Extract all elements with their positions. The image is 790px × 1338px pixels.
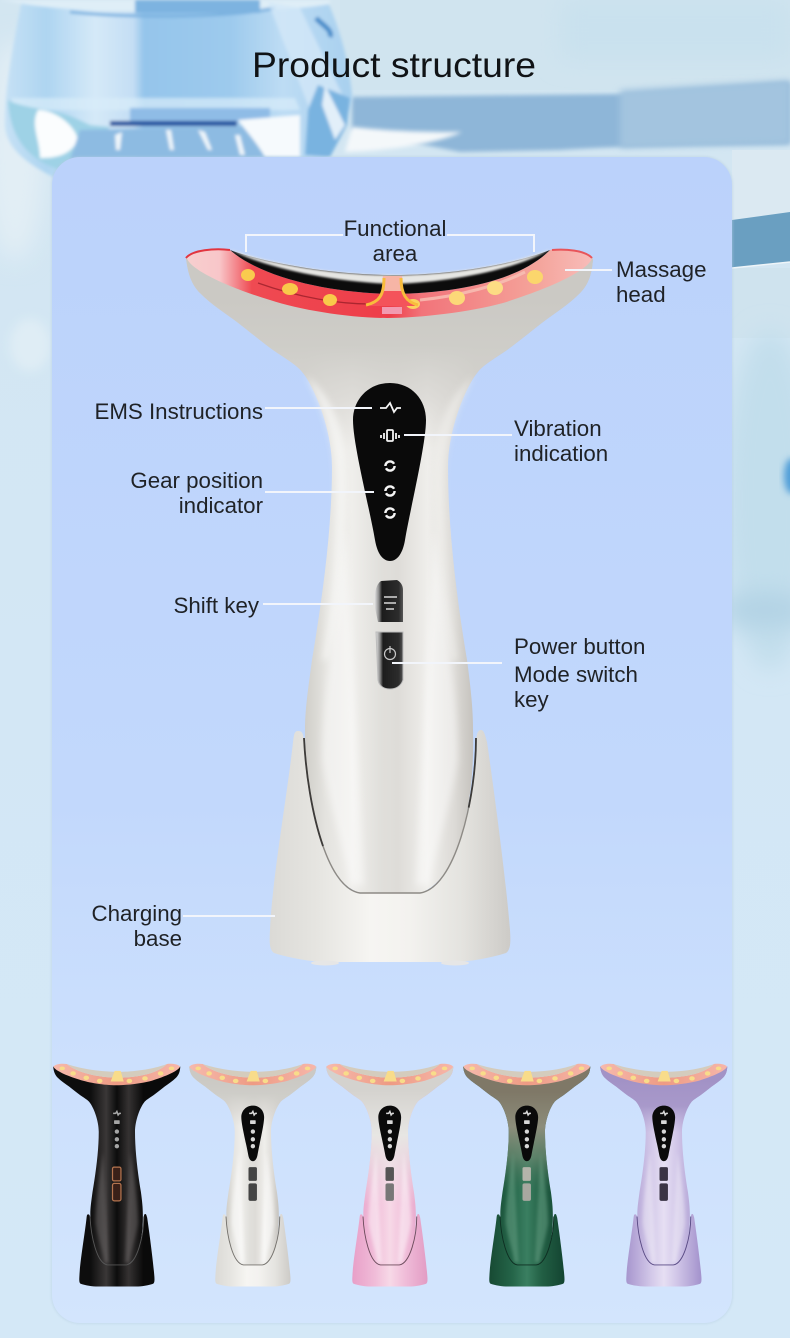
label: charging base: base [134, 926, 182, 951]
main panel [51, 156, 733, 1324]
label: gear position indicator [130, 468, 374, 518]
label: functional area: Functional [344, 216, 446, 241]
colour variant: black [53, 1064, 180, 1287]
colour variant: white [189, 1064, 316, 1287]
icon: vibration [381, 430, 399, 441]
gear indicators [385, 461, 395, 518]
label: charging base [92, 901, 275, 951]
power / mode key [376, 632, 403, 689]
label: massage head [565, 257, 706, 307]
label: vibration indication [404, 416, 608, 466]
label: vibration indication: indication [514, 441, 608, 466]
control panel [353, 383, 426, 561]
label: functional area [246, 216, 534, 266]
label: vibration indication: Vibration [514, 416, 602, 441]
colour variant: purple [600, 1064, 727, 1287]
shift key [375, 580, 403, 622]
icon: EMS pulse [380, 403, 401, 412]
head light band [186, 249, 592, 318]
label: massage head: head [616, 282, 666, 307]
label: massage head: Massage [616, 257, 706, 282]
colour variant: pink [326, 1064, 453, 1287]
glass of water [0, 0, 352, 178]
label: EMS instructions: EMS Instructions [94, 399, 263, 424]
colour variant: green [463, 1064, 590, 1287]
label: power button, mode switch key [392, 634, 645, 712]
label: power button, mode switch key: Power button [514, 634, 645, 659]
label: shift key: Shift key [173, 593, 260, 618]
label: functional area: area [373, 241, 418, 266]
body shading [306, 376, 346, 660]
label: gear position indicator: Gear position [130, 468, 263, 493]
device: main neck massager [186, 249, 593, 966]
charging base [270, 730, 510, 966]
label: power button, mode switch key: Mode switch [514, 662, 638, 687]
label: gear position indicator: indicator [179, 493, 264, 518]
label: charging base: Charging [92, 901, 182, 926]
title: Product structure [252, 46, 536, 85]
label: power button, mode switch key: key [514, 687, 550, 712]
